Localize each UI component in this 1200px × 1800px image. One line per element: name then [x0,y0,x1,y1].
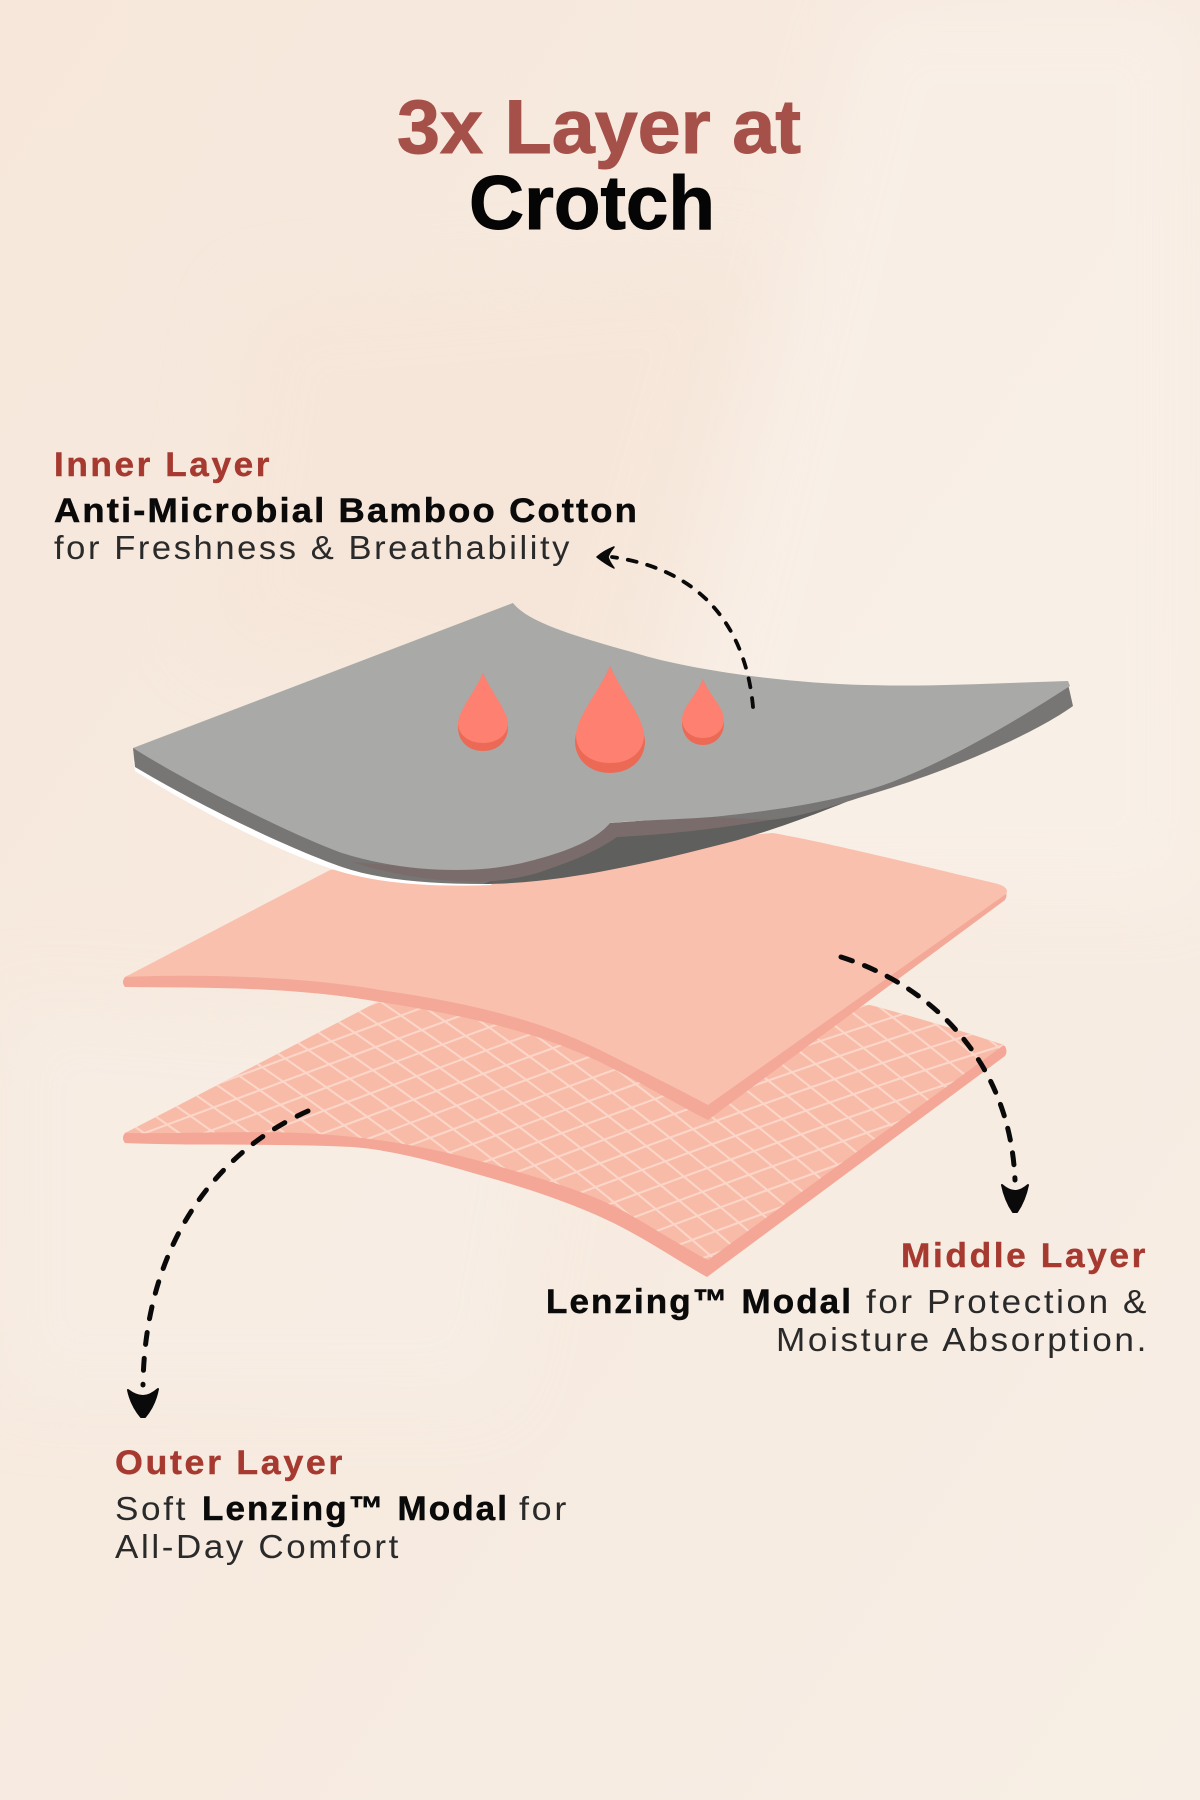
text block: outer layer [115,1444,569,1566]
icon: water drop centre [575,666,645,773]
text block: outer layer: All-Day Comfort [115,1529,401,1566]
text block: middle layer [546,1237,1149,1359]
arrow: inner layer [597,547,753,707]
left edge band [133,748,560,884]
text block: inner layer: Anti-Microbial Bamboo Cotton [54,492,639,530]
icon: water drop right [682,679,724,745]
text block: middle layer: Lenzing™ Modal [546,1283,853,1321]
text block: middle layer: Middle Layer [901,1237,1148,1275]
title [397,85,801,246]
middle layer sheet [123,833,1007,1120]
text block: outer layer: for [519,1491,569,1528]
dark underside [483,752,960,884]
text block: outer layer: Outer Layer [115,1444,345,1482]
text block: middle layer: for Protection & [866,1284,1149,1321]
inner layer sheet with drops [133,603,1073,886]
mauve fold band [352,816,770,882]
text block: outer layer: Lenzing™ Modal [202,1490,509,1528]
text block: middle layer: Moisture Absorption. [776,1322,1149,1359]
text block: outer layer: Soft [115,1491,188,1528]
title: 3x Layer at [397,85,801,170]
icon: water drop left [458,673,508,751]
text block: inner layer: Inner Layer [54,446,272,484]
text block: inner layer [54,446,639,567]
white edge sliver [133,760,492,886]
title: Crotch [469,161,715,246]
text block: inner layer: for Freshness & Breathability [54,530,572,567]
right edge band [712,684,1073,820]
arrow: middle layer [841,957,1028,1212]
arrow: outer layer [128,1111,308,1417]
outer layer sheet with lattice [123,1002,1006,1277]
top surface [133,603,1070,870]
layered fabric illustration [123,603,1073,1277]
